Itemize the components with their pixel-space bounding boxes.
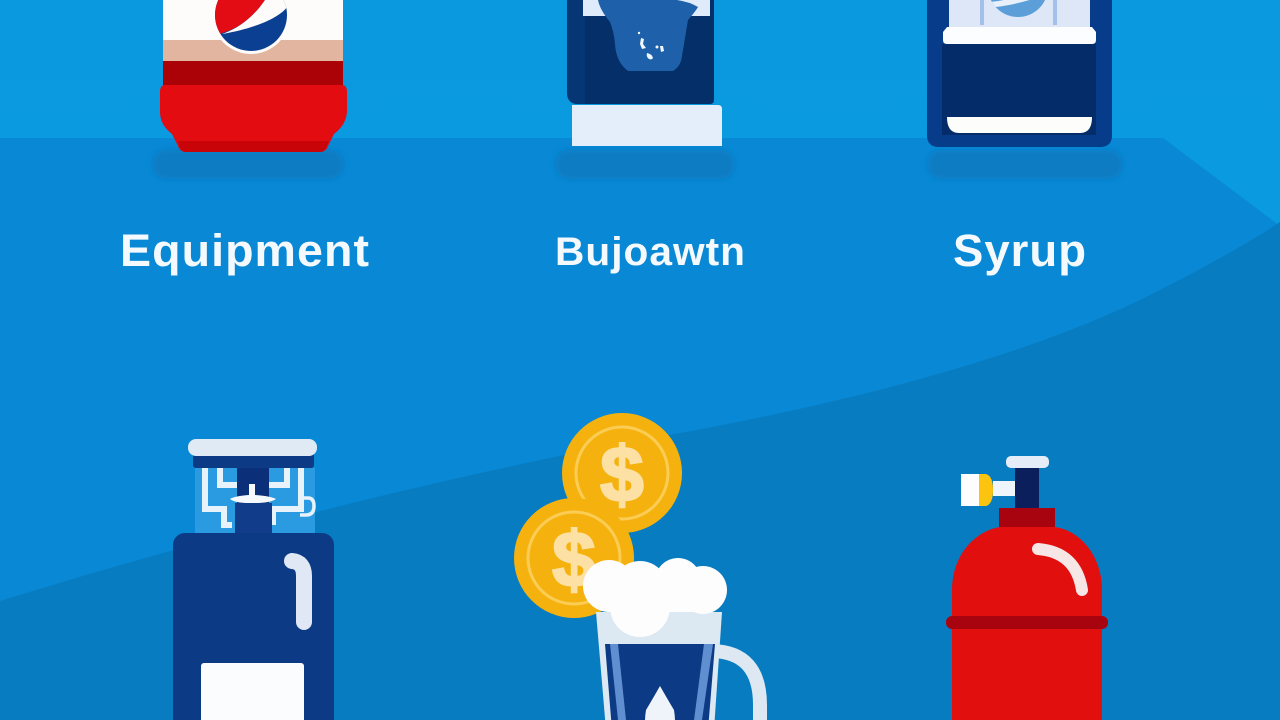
dispenser pipes [205, 468, 314, 525]
mug glass [596, 612, 722, 720]
icon: soda dispenser machine [173, 439, 334, 720]
dispenser white panel [201, 663, 304, 720]
box light panel [949, 0, 1090, 27]
dispenser lower column [235, 503, 272, 533]
filter shadow [556, 150, 734, 179]
logo: red white blue globe [212, 0, 290, 55]
tank valve arm [993, 481, 1016, 496]
mug liquid [605, 644, 715, 720]
coin: upper [562, 413, 682, 533]
bottle tan stripe [163, 40, 343, 61]
box panel stripes [980, 0, 1057, 25]
filter housing left shade [567, 0, 585, 104]
tank body [952, 527, 1102, 720]
dispenser handle [292, 561, 304, 622]
filter pale base [572, 105, 722, 146]
logo: faded globe [991, 0, 1045, 17]
label: Syrup: Syrup [953, 225, 1087, 276]
coin: lower: $ [552, 515, 596, 603]
tank side valve yellow [979, 474, 993, 506]
tank band [946, 616, 1108, 629]
bottle shadow [153, 150, 343, 179]
icon: syrup box [927, 0, 1122, 179]
mug foam [583, 558, 727, 637]
icon: water filter unit [556, 0, 734, 179]
dispenser centre column [237, 468, 269, 505]
filter water specks [638, 32, 664, 59]
tank highlight [1038, 549, 1082, 590]
filter dark housing [567, 0, 714, 104]
dispenser dark lid [193, 452, 314, 468]
tank neck [999, 508, 1055, 528]
dispenser nozzle [230, 484, 276, 503]
label: Equipment: Equipment [120, 225, 370, 276]
icon: red CO2 tank [946, 456, 1108, 720]
box white bar [943, 27, 1096, 44]
dispenser body [173, 533, 334, 720]
label: garbled word: Bujoawtn [555, 230, 746, 274]
dispenser top cap [188, 439, 317, 456]
icon: Pepsi syrup bottle [153, 0, 347, 179]
mug handle [712, 651, 760, 720]
box dark interior [942, 44, 1096, 135]
filter light window [583, 0, 710, 16]
tank cap [1006, 456, 1049, 468]
bottle white label [163, 0, 343, 41]
bottle red base [160, 85, 347, 152]
background: darker blue lower wave [0, 222, 1280, 720]
coin: lower [514, 498, 634, 618]
coin: upper: $ [600, 430, 644, 518]
filter blue cup [598, 0, 698, 71]
box white tray [947, 117, 1092, 133]
tank stem [1015, 468, 1039, 510]
box navy frame [927, 0, 1112, 147]
icon: coins and beer mug [514, 413, 760, 720]
dispenser glow panel [195, 468, 315, 533]
tank side valve white [961, 474, 980, 506]
box shadow [928, 150, 1122, 179]
bottle dark red stripe [163, 61, 343, 86]
mug water drop [645, 686, 675, 720]
bottle base lip [178, 141, 329, 152]
mug highlights [610, 644, 713, 720]
